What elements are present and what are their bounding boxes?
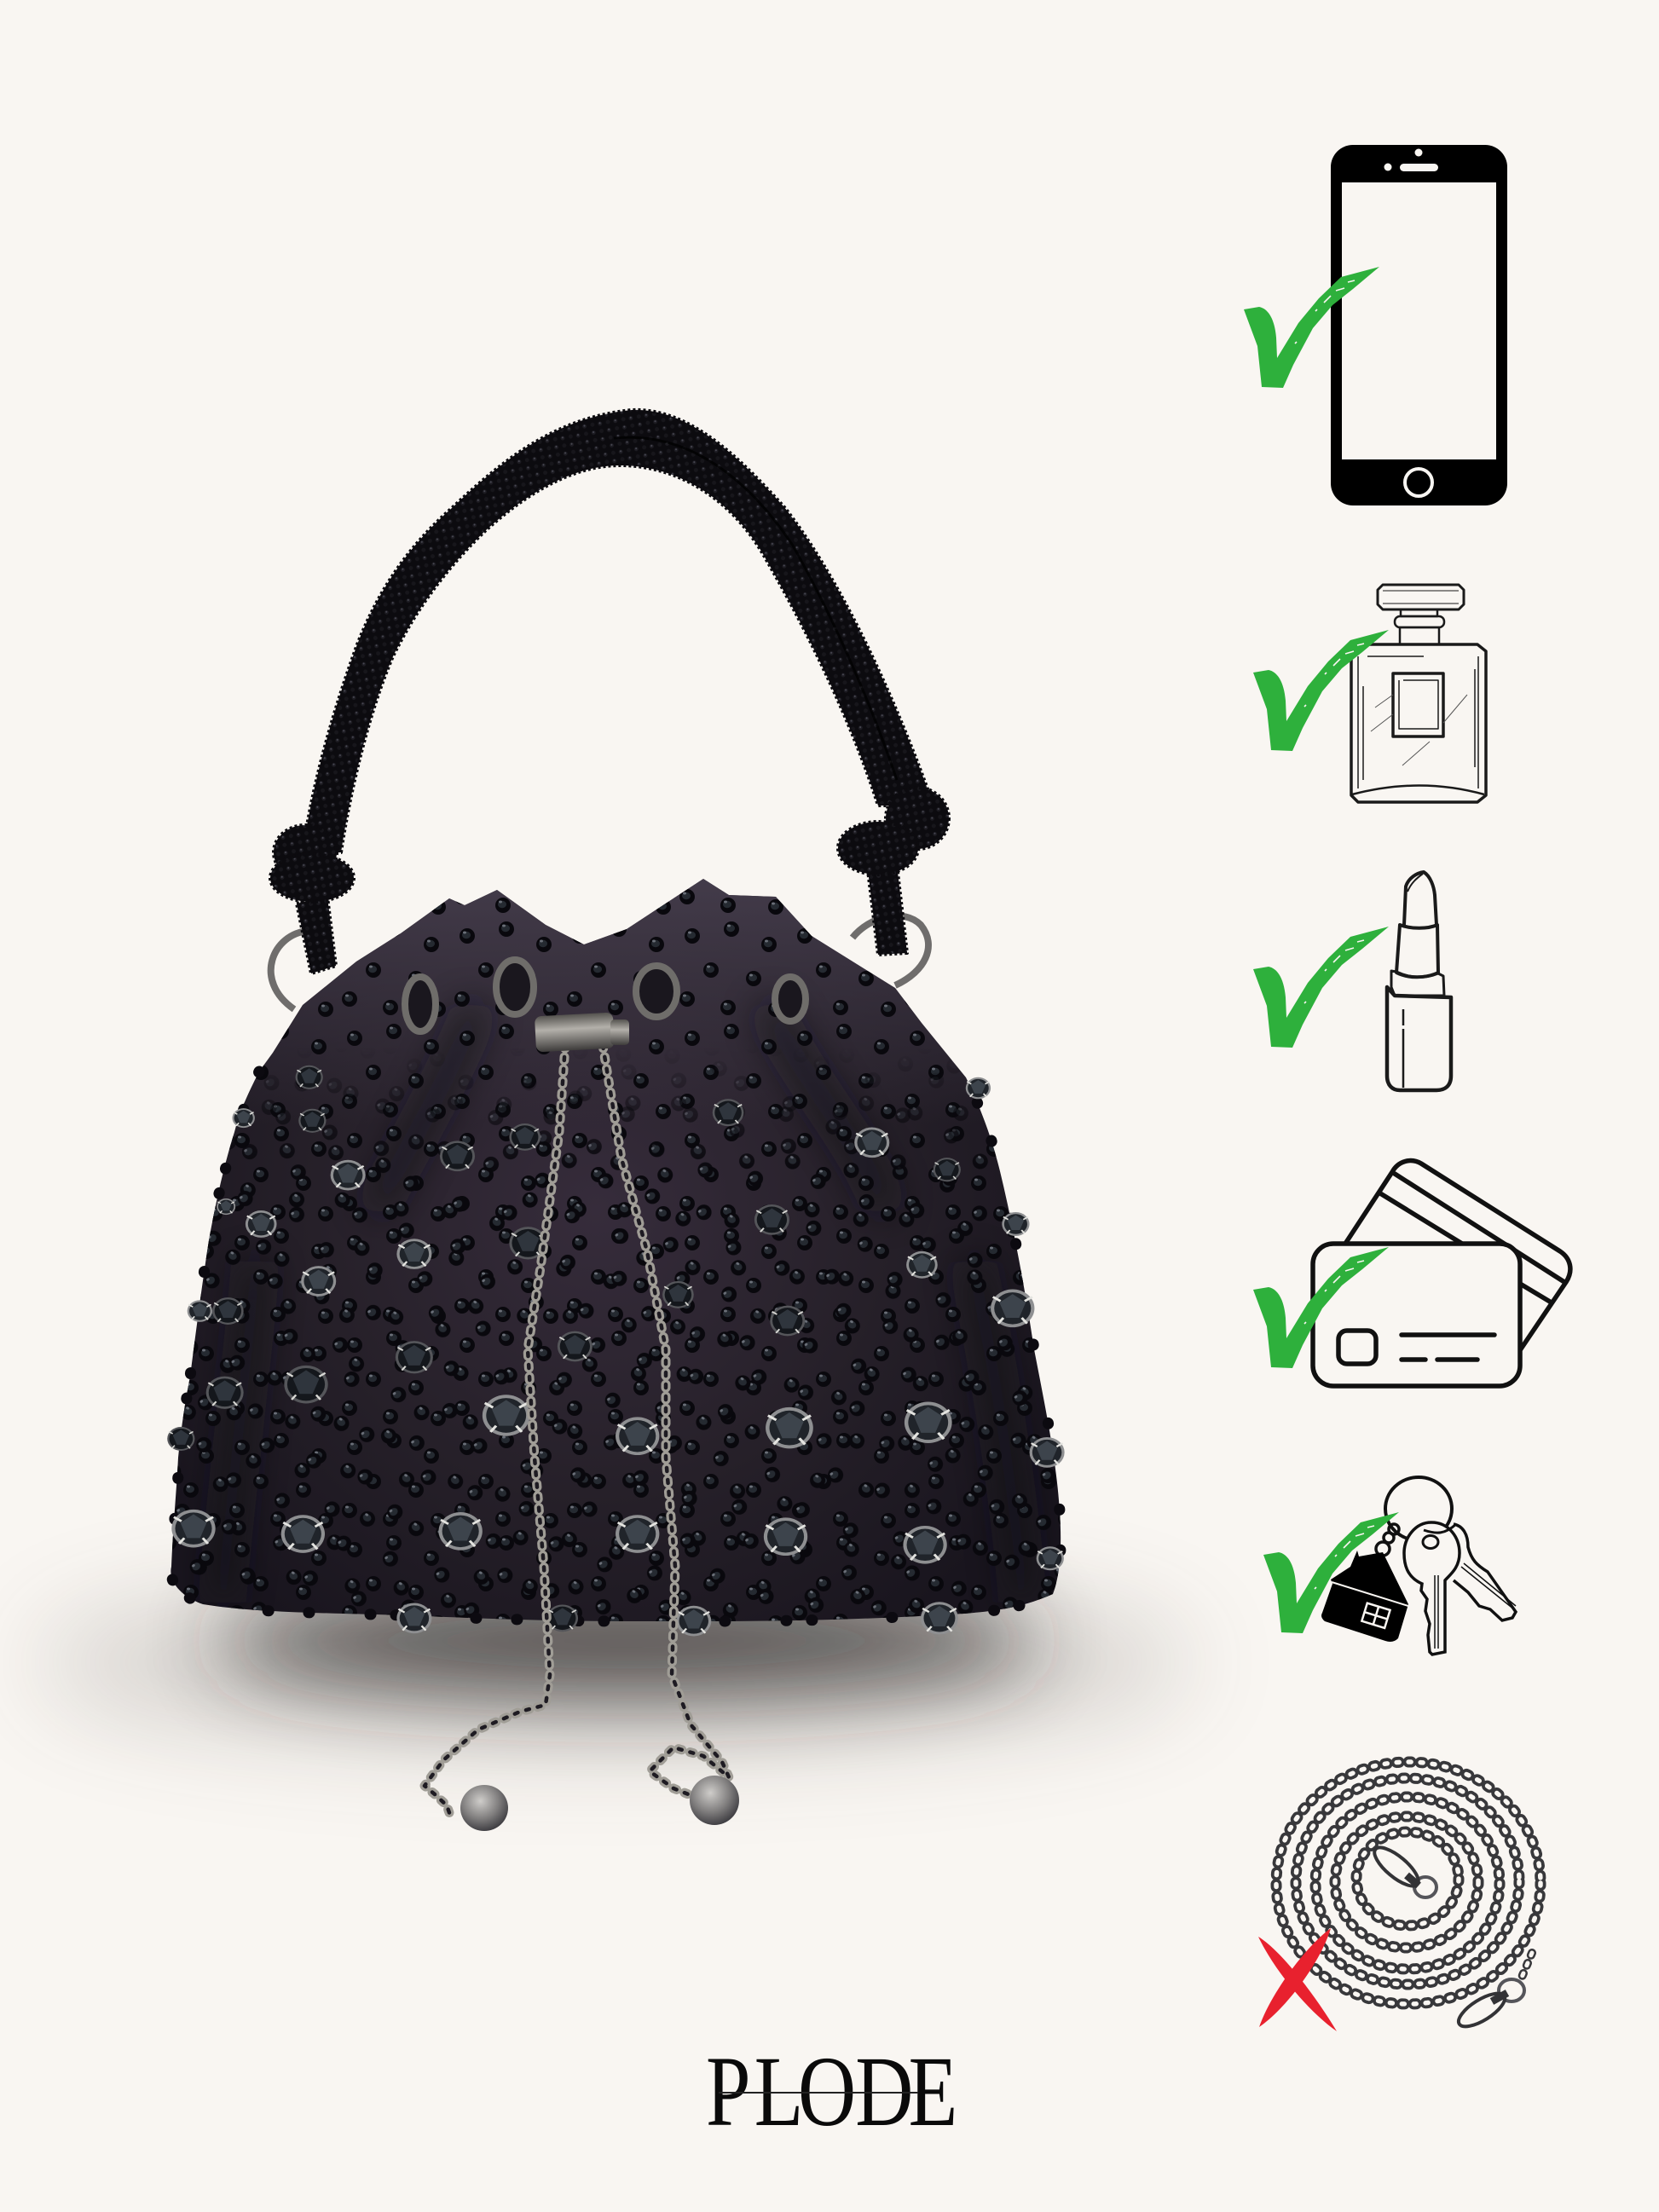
chain end balls <box>460 1776 739 1831</box>
icon: green check <box>1244 267 1379 388</box>
icon: green check <box>1253 1247 1389 1368</box>
key 2 <box>1454 1524 1516 1620</box>
fabric folds <box>222 1006 1023 1603</box>
item: keys <box>1263 1477 1516 1655</box>
product: beaded drawstring bucket bag <box>162 410 1074 1831</box>
bag rings <box>271 915 928 1009</box>
key 1 <box>1404 1522 1460 1655</box>
item: smartphone <box>1244 145 1507 505</box>
item: long chain strap (not included) <box>1258 1762 1540 2033</box>
item: perfume bottle <box>1253 585 1486 802</box>
large stones <box>167 1066 1065 1636</box>
icon: coiled chain <box>1276 1762 1540 2033</box>
brand logo: PLODE <box>706 2036 957 2148</box>
handle strand divider <box>614 437 897 780</box>
rhinestone handle <box>270 410 949 973</box>
icon: phone <box>1331 145 1507 505</box>
icon: perfume <box>1351 585 1486 802</box>
beads on silhouette edge <box>171 1071 1061 1621</box>
small beads <box>162 869 1074 1637</box>
icon: red cross <box>1258 1928 1337 2031</box>
icon: keys and house fob <box>1321 1477 1516 1655</box>
icon: lipstick <box>1387 872 1451 1090</box>
item: lipstick <box>1253 872 1451 1090</box>
icon: green check <box>1253 927 1389 1048</box>
snap hooks <box>1454 1987 1510 2033</box>
icon: green check <box>1253 630 1389 751</box>
bag body <box>162 869 1074 1637</box>
bag ground shadow <box>34 1577 1194 1747</box>
item: credit cards <box>1253 1161 1570 1386</box>
icon: cards <box>1313 1161 1570 1386</box>
drawstring chains <box>425 1045 729 1820</box>
icon: green check <box>1263 1512 1399 1633</box>
eyelets <box>405 960 806 1031</box>
barrel clasp <box>535 1013 629 1052</box>
